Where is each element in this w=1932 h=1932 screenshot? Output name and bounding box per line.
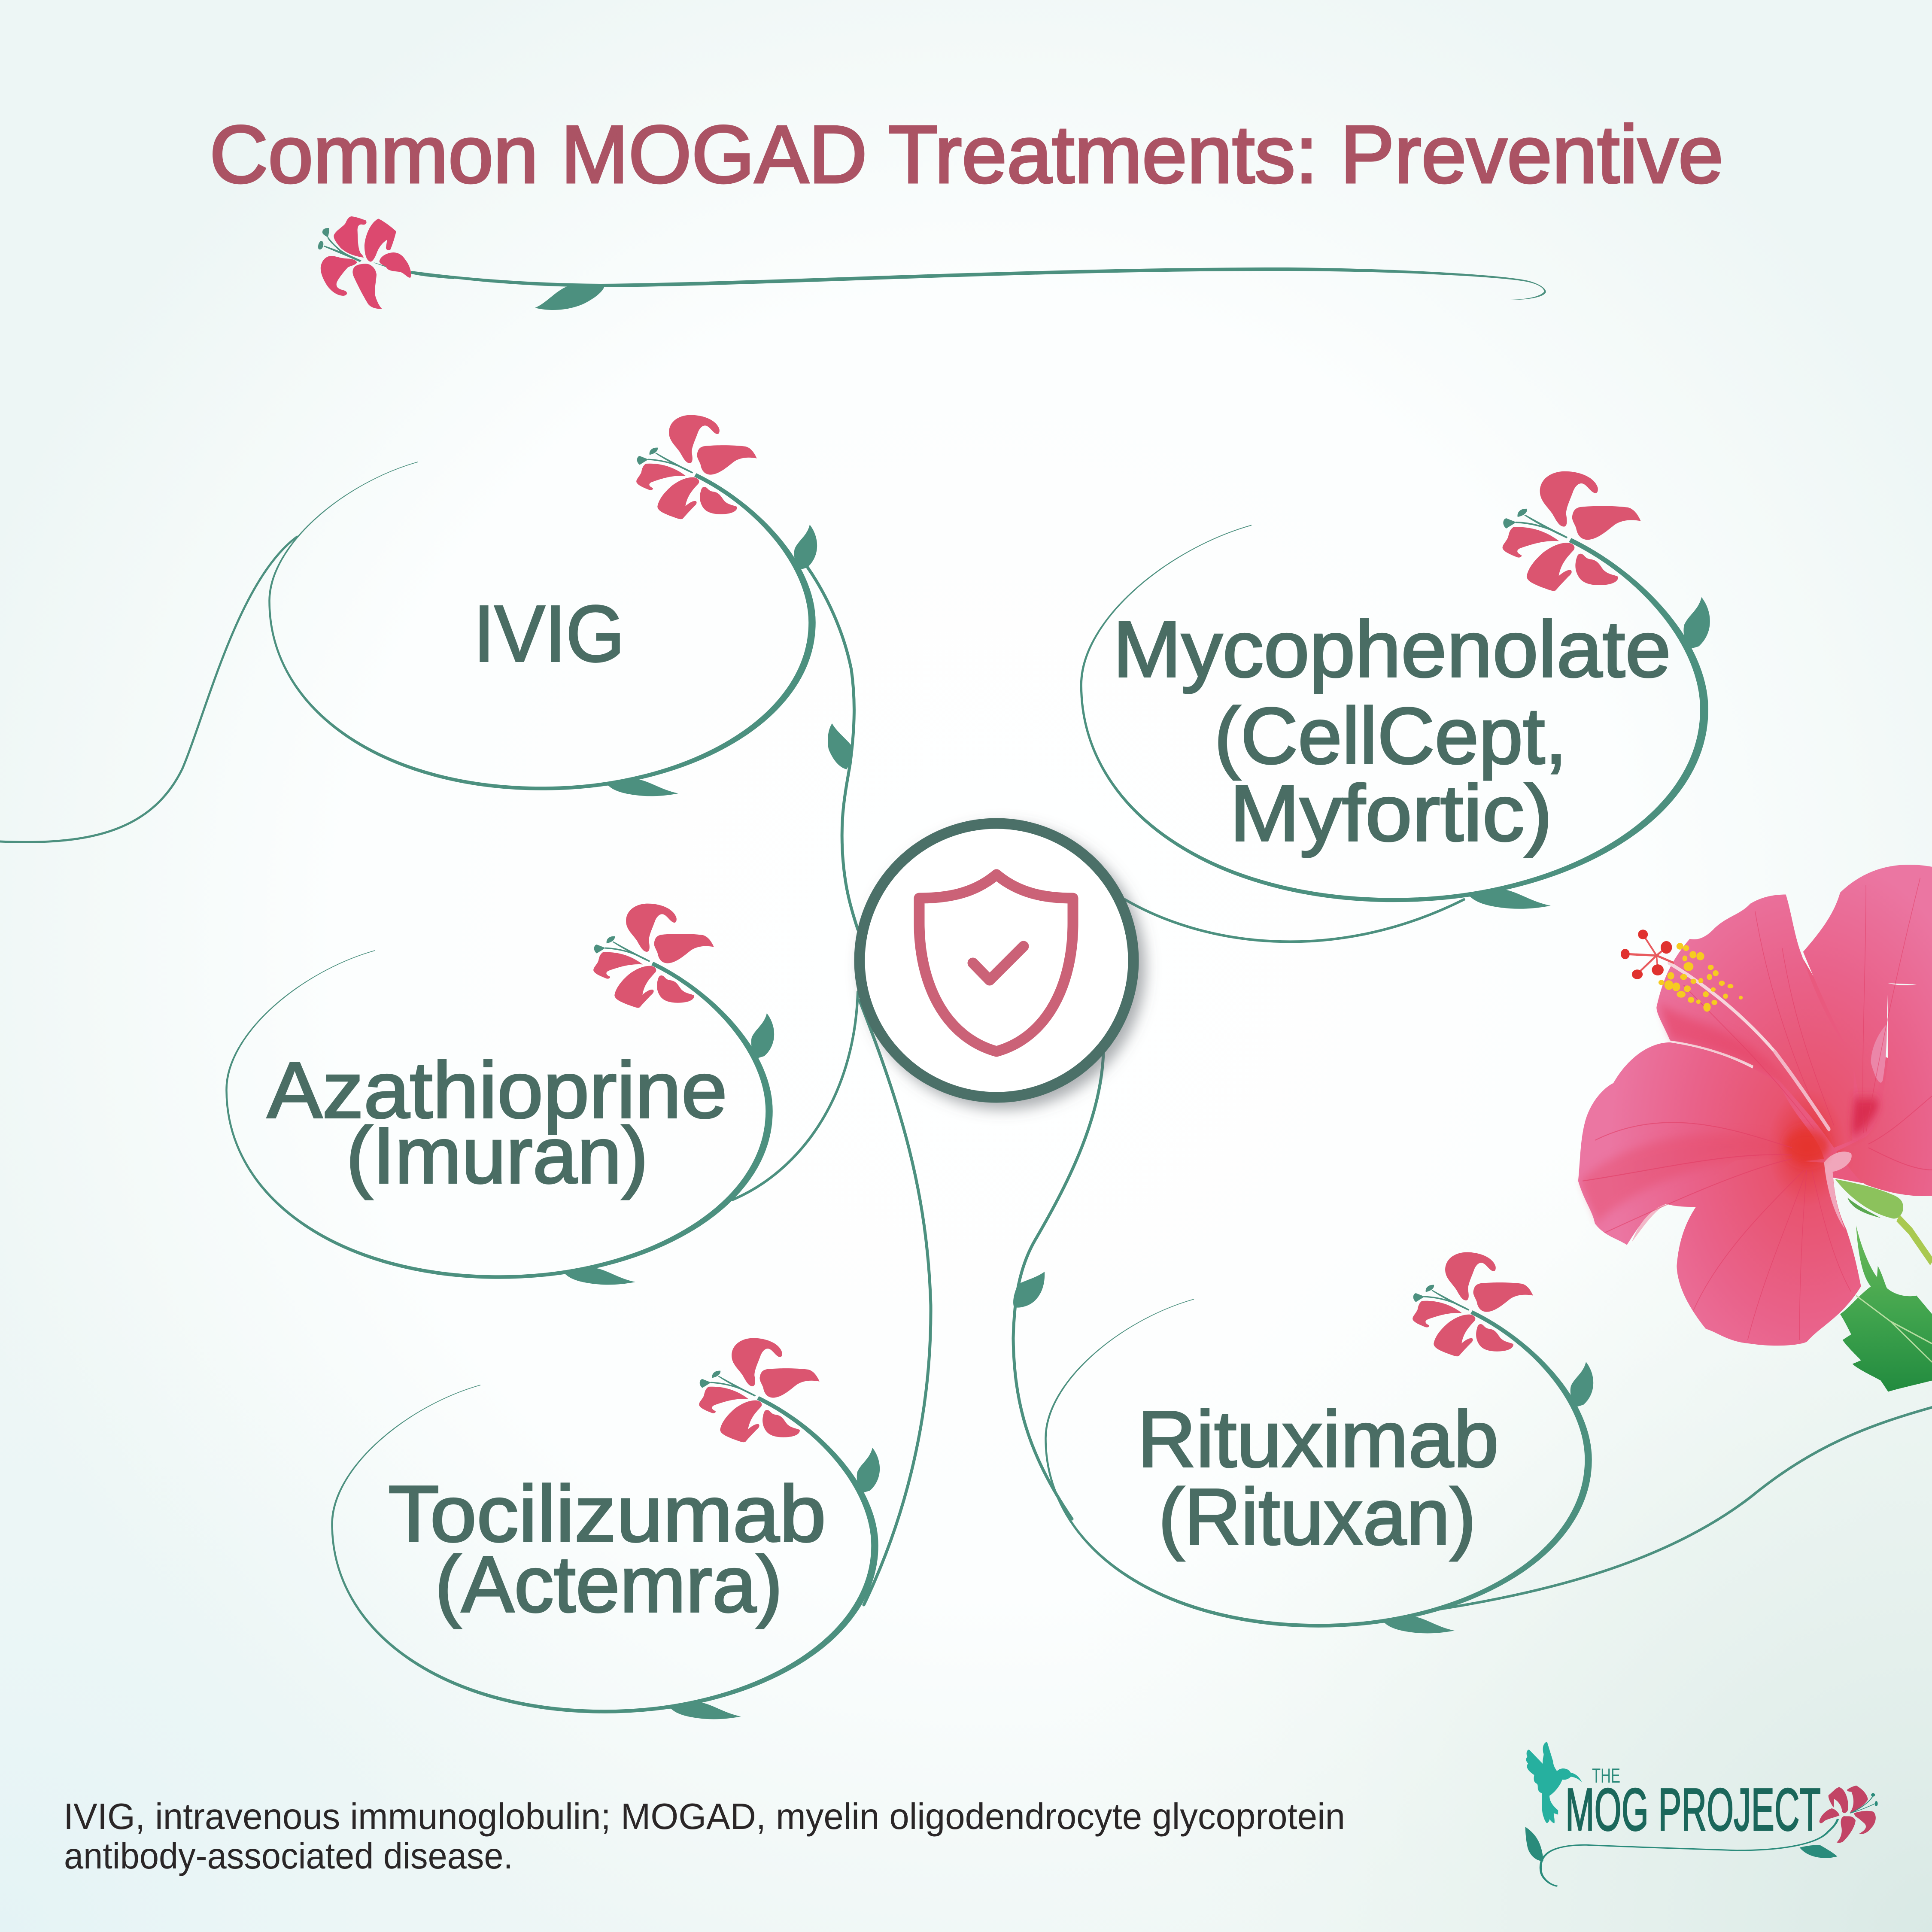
icon: shield badge <box>860 823 1133 1097</box>
panel: IVIG <box>269 415 817 796</box>
vine: Mycophenolate to centre <box>1125 899 1464 942</box>
vine leaf: Rituximab connector <box>1013 1272 1045 1308</box>
vine: Rituximab to centre <box>1013 1052 1103 1519</box>
label: Imuran: (Imuran) <box>346 1111 648 1200</box>
panel: Mycophenolate <box>1081 471 1710 909</box>
label: IVIG: IVIG <box>474 589 625 678</box>
logo icon: hummingbird <box>1526 1742 1582 1823</box>
vine: IVIG to centre <box>807 567 858 930</box>
logo text: THE: THE <box>1592 1764 1620 1787</box>
panel: Rituximab <box>1045 1252 1593 1633</box>
label: CellCept: (CellCept, <box>1214 692 1567 781</box>
label: Myfortic: Myfortic) <box>1230 769 1552 858</box>
vine: Tocilizumab to centre <box>860 1000 931 1605</box>
vine leaf: IVIG connector <box>828 723 851 769</box>
vine: left edge to IVIG <box>0 537 297 842</box>
vine: Azathioprine to centre <box>732 992 858 1200</box>
label: Actemra: (Actemra) <box>435 1540 783 1629</box>
label: Rituxan: (Rituxan) <box>1158 1473 1476 1561</box>
title: Common MOGAD Treatments: Preventive <box>210 109 1723 200</box>
logo vine and leaves <box>1525 1786 1878 1886</box>
title vine with flower <box>318 216 1546 310</box>
label: Tocilizumab: Tocilizumab <box>388 1470 826 1558</box>
logo: The MOG Project <box>1525 1742 1878 1886</box>
hibiscus flower photo <box>1578 865 1932 1392</box>
label: Mycophenolate: Mycophenolate <box>1113 605 1671 694</box>
footnote: IVIG, intravenous immunoglobulin; MOGAD, myelin oligodendrocyte glycoprotein <box>64 1796 1345 1837</box>
footnote <box>64 1796 1345 1877</box>
connecting vines <box>0 537 1932 1610</box>
label: Azathioprine: Azathioprine <box>267 1046 727 1135</box>
panel: Azathioprine <box>226 904 774 1285</box>
label: Rituximab: Rituximab <box>1137 1395 1499 1484</box>
vine: Rituximab to right edge <box>1434 1407 1932 1610</box>
footnote: antibody-associated disease. <box>64 1836 513 1877</box>
panel: Tocilizumab <box>331 1338 880 1719</box>
